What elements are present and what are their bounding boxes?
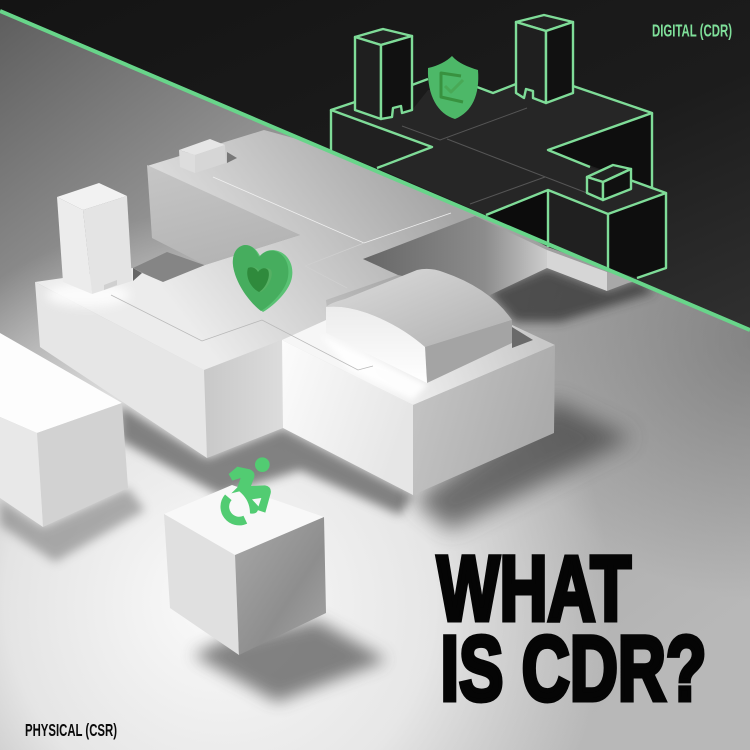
digital tower: left bbox=[355, 29, 412, 119]
icon: heart bbox=[233, 245, 292, 312]
roof guide lines bbox=[111, 177, 451, 370]
building: tower bbox=[46, 183, 142, 307]
cast shadows on the ground bbox=[0, 252, 655, 702]
title: WHAT bbox=[437, 538, 631, 640]
main block faces bbox=[35, 282, 555, 495]
building: small roof box bbox=[179, 139, 237, 173]
icon: shield bbox=[428, 56, 478, 119]
faint circuit lines bbox=[402, 108, 587, 204]
digital wireframe faces bbox=[331, 84, 666, 278]
icon: wheelchair bbox=[225, 457, 271, 521]
title bbox=[437, 538, 706, 720]
building: T-shaped roof surface bbox=[35, 130, 555, 405]
floating cube bbox=[164, 485, 326, 655]
digital wireframe outline bbox=[331, 79, 666, 278]
left lower block bbox=[0, 333, 128, 527]
building: vaulted roof bbox=[320, 269, 533, 400]
label: physical: PHYSICAL (CSR) bbox=[25, 720, 117, 740]
diagonal divider bbox=[0, 11, 750, 330]
digital panel background bbox=[0, 0, 750, 330]
digital small box bbox=[587, 165, 631, 200]
digital tower: right bbox=[516, 15, 573, 103]
back wing faces bbox=[147, 165, 640, 296]
